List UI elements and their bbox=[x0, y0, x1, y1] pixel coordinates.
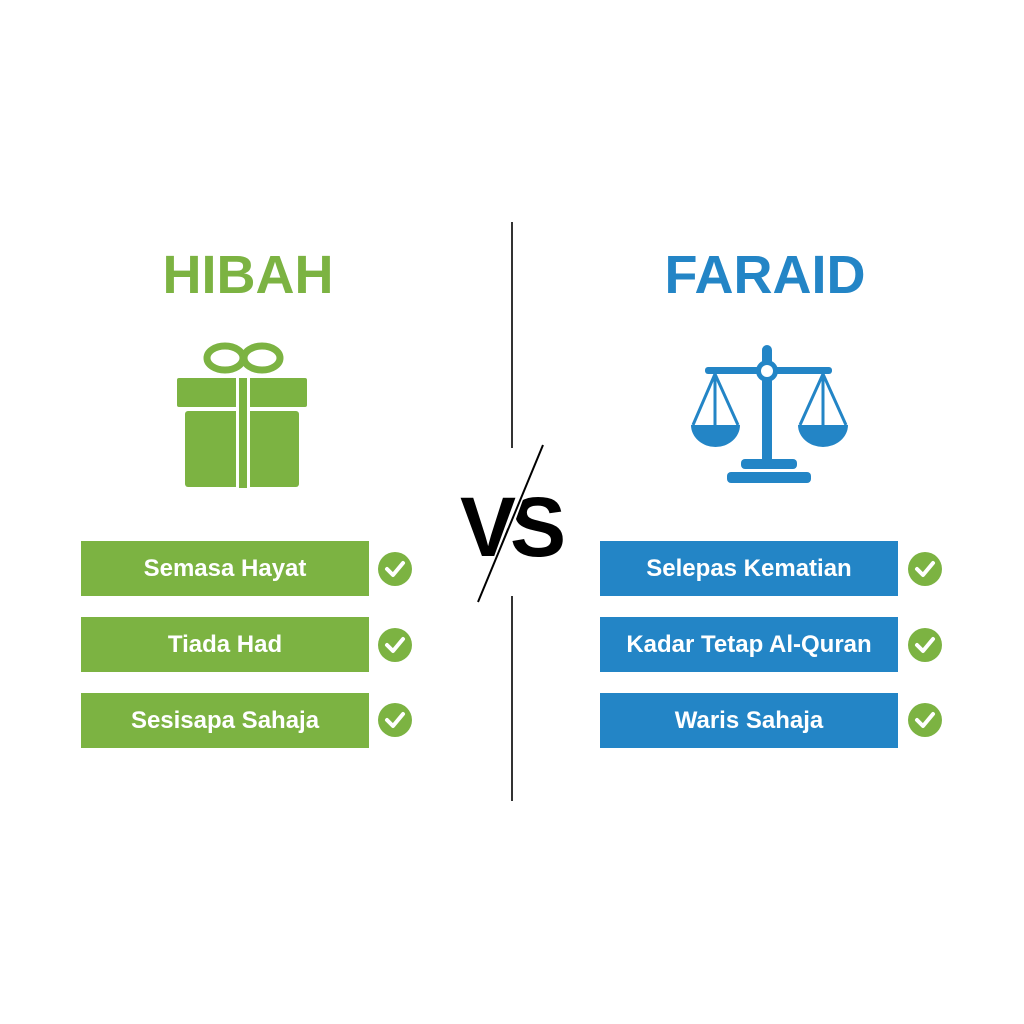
item: tiada had bbox=[81, 617, 369, 672]
item: sesisapa sahaja: Sesisapa Sahaja bbox=[131, 706, 319, 734]
item: selepas kematian bbox=[600, 541, 898, 596]
check icons bbox=[378, 552, 942, 737]
icon: scale bbox=[691, 345, 848, 483]
item: kadar tetap: Kadar Tetap Al-Quran bbox=[626, 630, 872, 658]
faraid items bbox=[600, 541, 898, 748]
divider bottom bbox=[511, 596, 513, 801]
item: waris sahaja: Waris Sahaja bbox=[675, 706, 823, 734]
vs badge bbox=[460, 444, 563, 602]
item: semasa hayat: Semasa Hayat bbox=[144, 554, 306, 582]
title: hibah: HIBAH bbox=[162, 245, 334, 305]
item: semasa hayat bbox=[81, 541, 369, 596]
item: selepas kematian: Selepas Kematian bbox=[646, 554, 852, 582]
icon: gift bbox=[177, 342, 307, 488]
item: sesisapa sahaja bbox=[81, 693, 369, 748]
item: kadar tetap bbox=[600, 617, 898, 672]
title: faraid: FARAID bbox=[664, 245, 866, 305]
item: waris sahaja bbox=[600, 693, 898, 748]
divider top bbox=[511, 222, 513, 448]
vs badge: VS bbox=[460, 480, 563, 574]
item: tiada had: Tiada Had bbox=[168, 630, 282, 658]
hibah items bbox=[81, 541, 369, 748]
